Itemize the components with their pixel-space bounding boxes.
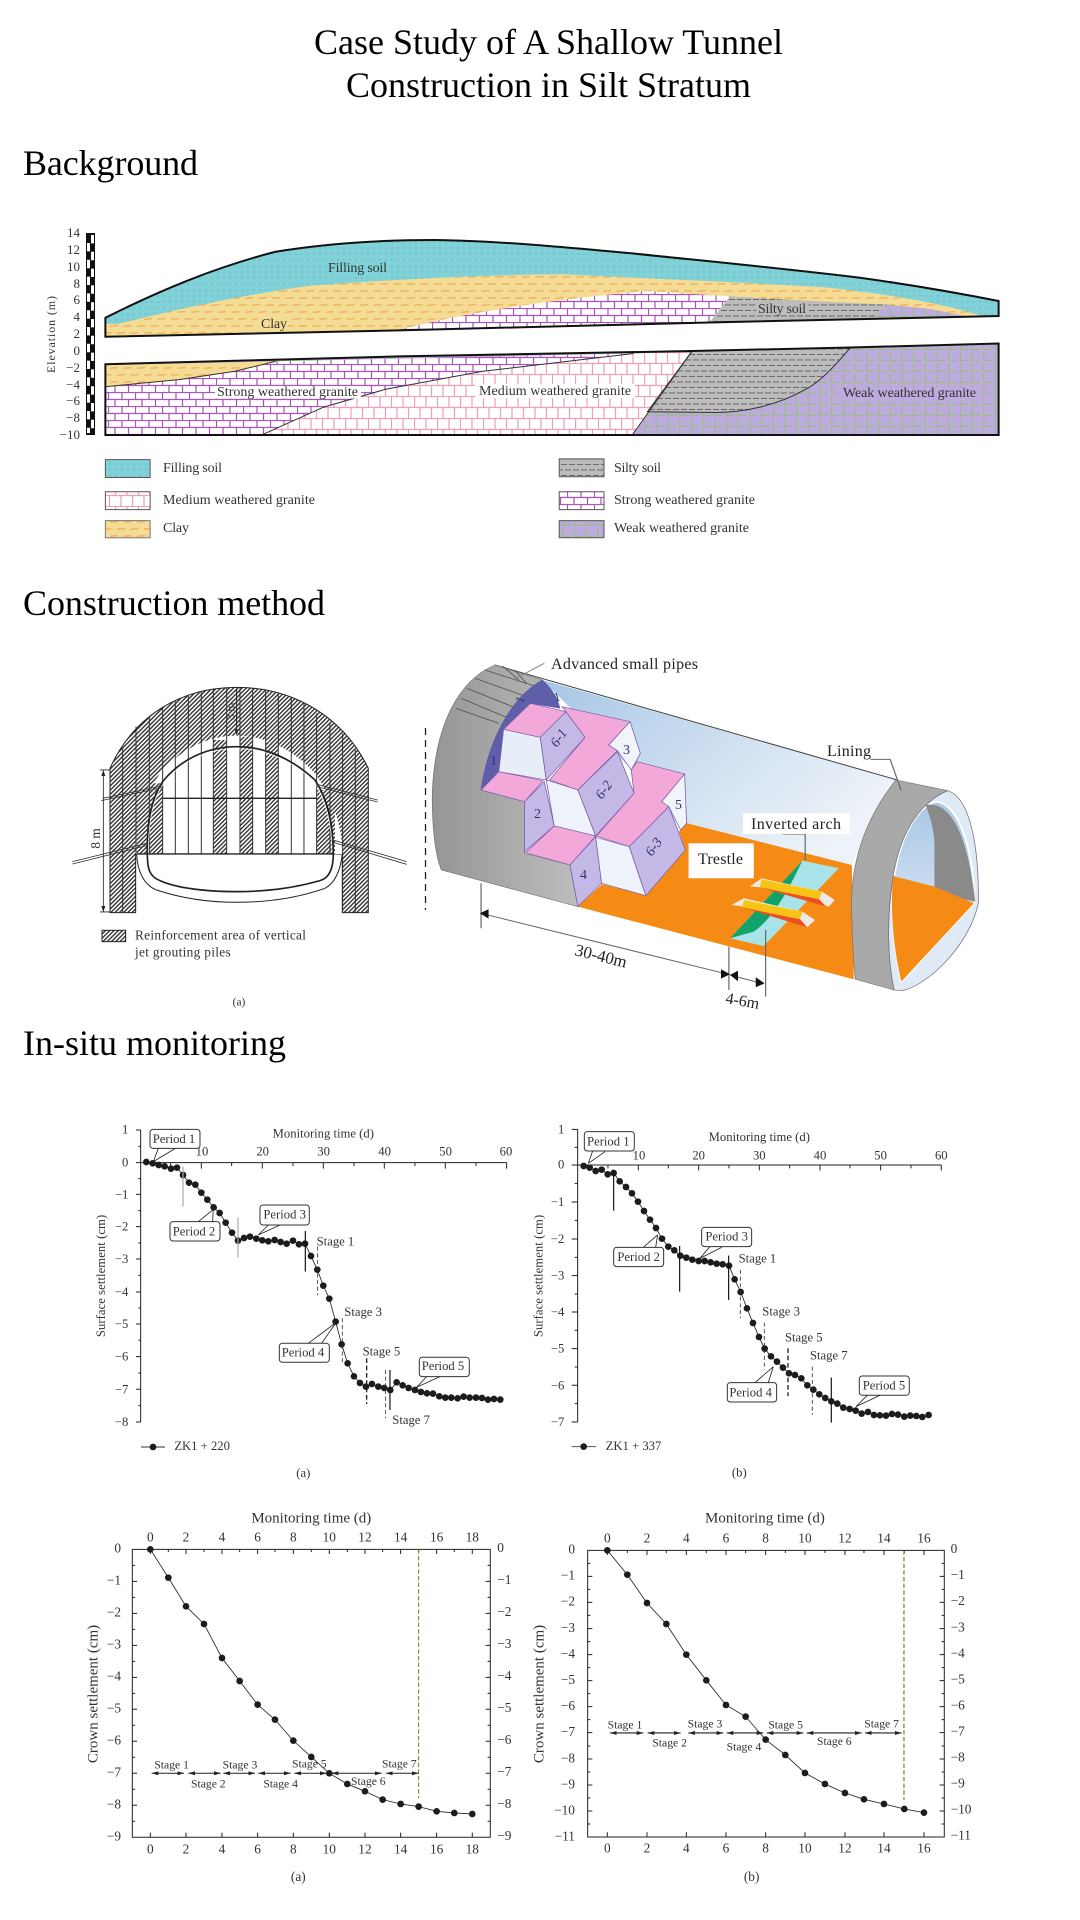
elevation axis labels: −2: [66, 360, 80, 375]
tunnel labels: Advanced small pipes: [551, 656, 698, 673]
x labels: [196, 1144, 512, 1158]
y labels: −1: [115, 1187, 128, 1201]
top x labels: 2: [644, 1531, 650, 1546]
step numbers: 1: [552, 689, 562, 705]
diagram: tunnel cross-section with grouting piles: [72, 687, 407, 1008]
title: Construction in Silt Stratum: [346, 65, 751, 105]
heading: Background: Background: [23, 143, 198, 183]
step numbers: 1: [490, 754, 497, 769]
period callouts: [150, 1129, 469, 1387]
axes: [136, 1130, 507, 1422]
top x labels: [147, 1530, 479, 1545]
legend: reinforcement area: jet grouting piles: [134, 945, 231, 960]
left y labels: −3: [561, 1620, 575, 1635]
y labels: 0: [558, 1157, 564, 1171]
y labels: 1: [558, 1122, 564, 1136]
elevation axis labels: 4: [74, 309, 80, 324]
caption (a): (a): [296, 1466, 310, 1480]
bottom x labels: 8: [290, 1841, 297, 1856]
period callouts: Period 1: [153, 1132, 195, 1146]
tunnel labels: Lining: [827, 743, 871, 760]
tunnel labels: 4-6m: [724, 990, 761, 1013]
tunnel lining: [147, 747, 333, 892]
x labels: 10: [196, 1144, 208, 1158]
bottom x labels: 12: [358, 1841, 372, 1856]
top x labels: 8: [290, 1530, 297, 1545]
x labels: 60: [500, 1144, 512, 1158]
left y labels: 0: [568, 1542, 575, 1557]
stage labels: Stage 5: [785, 1331, 823, 1345]
top x labels: 0: [604, 1531, 611, 1546]
elevation axis labels: 0: [74, 343, 80, 358]
left y labels: −2: [561, 1594, 575, 1609]
top x labels: 8: [762, 1531, 769, 1546]
front lining ring: [851, 780, 978, 991]
elevation axis labels: −4: [66, 377, 80, 392]
axis titles: [85, 1511, 371, 1763]
period callouts: Period 4: [282, 1346, 325, 1360]
stratum labels: Medium weathered granite: [479, 384, 631, 399]
top x labels: 16: [917, 1531, 931, 1546]
bottom x labels: 10: [798, 1841, 812, 1856]
x labels: 30: [317, 1144, 330, 1158]
right y labels: 0: [497, 1540, 504, 1555]
right y labels: −4: [951, 1645, 965, 1660]
left y labels: −2: [107, 1605, 121, 1620]
y labels: −3: [115, 1252, 128, 1266]
left y labels: −7: [561, 1724, 575, 1739]
frame and ticks: [132, 1549, 490, 1837]
elevation axis labels: −6: [66, 393, 80, 408]
y labels: −2: [115, 1220, 128, 1234]
phase and stage markers: [614, 1171, 831, 1423]
top x labels: 18: [466, 1530, 479, 1545]
top x labels: 12: [358, 1530, 372, 1545]
axis titles: Monitoring time (d): [273, 1126, 374, 1140]
period callouts: Period 3: [705, 1230, 748, 1244]
axes: [572, 1129, 941, 1422]
top x labels: 4: [219, 1530, 226, 1545]
stage labels: Stage 6: [351, 1775, 386, 1788]
x labels: 10: [633, 1148, 645, 1162]
tunnel interior: [542, 680, 897, 865]
stratum labels: Weak weathered granite: [843, 386, 976, 401]
stage labels: Stage 1: [154, 1758, 189, 1771]
y labels: −7: [551, 1415, 564, 1429]
axis titles: Monitoring time (d): [705, 1511, 825, 1527]
right y labels: −7: [951, 1723, 965, 1738]
top x labels: 10: [323, 1530, 336, 1545]
axis titles: Surface settlement (cm): [531, 1215, 545, 1337]
right y labels: [951, 1541, 972, 1843]
stage labels: Stage 3: [344, 1305, 382, 1319]
stage labels: Stage 1: [739, 1251, 776, 1265]
top x labels: 14: [877, 1531, 891, 1546]
bottom x labels: 14: [877, 1841, 891, 1856]
right y labels: −3: [497, 1636, 512, 1651]
period callouts: Period 3: [263, 1208, 306, 1222]
axis titles: Crown settlement (cm): [85, 1625, 101, 1763]
bottom x labels: 10: [323, 1841, 336, 1856]
right y labels: −1: [951, 1567, 965, 1582]
stage labels: Stage 7: [382, 1758, 417, 1771]
axis titles: Surface settlement (cm): [94, 1215, 108, 1337]
bottom x labels: 18: [466, 1841, 479, 1856]
left y labels: 0: [114, 1541, 121, 1556]
stage labels: Stage 4: [727, 1741, 761, 1754]
right y labels: 0: [951, 1541, 958, 1556]
x labels: 40: [378, 1144, 391, 1158]
stage labels: Stage 6: [817, 1735, 852, 1748]
y labels: −4: [115, 1285, 129, 1299]
end-of-stage dashed line: [902, 1550, 906, 1800]
y labels: −6: [551, 1378, 564, 1392]
top x labels: 6: [254, 1530, 261, 1545]
bottom x labels: [147, 1841, 479, 1856]
stage labels: Stage 3: [688, 1718, 722, 1731]
stage arrows: [152, 1772, 419, 1775]
y labels: −3: [551, 1269, 564, 1283]
left y labels: −8: [561, 1750, 575, 1765]
y labels: −7: [115, 1382, 128, 1396]
bottom x labels: 12: [838, 1841, 852, 1856]
heading: In-situ monitoring: In-situ monitoring: [23, 1023, 286, 1063]
stratum labels: Filling soil: [328, 261, 387, 276]
stage labels: Stage 3: [762, 1305, 800, 1319]
right y labels: −2: [497, 1604, 511, 1619]
elevation axis labels: 10: [67, 259, 80, 274]
bottom x labels: 16: [917, 1841, 931, 1856]
right y labels: −10: [951, 1802, 972, 1817]
legend: Filling soil: [163, 461, 222, 476]
left y labels: −1: [107, 1573, 121, 1588]
period callouts: Period 4: [729, 1385, 773, 1399]
bottom x labels: 2: [644, 1841, 650, 1856]
caption (b): (b): [744, 1869, 759, 1884]
chart: surface settlement ZK1+337: [531, 1122, 948, 1479]
x labels: 20: [256, 1144, 269, 1158]
y labels: −6: [115, 1350, 128, 1364]
elevation axis labels: 12: [67, 242, 80, 257]
legend: [572, 1439, 661, 1453]
stage labels: Stage 5: [363, 1344, 400, 1358]
advanced pipes hatching: [456, 666, 536, 723]
y labels: 0: [122, 1156, 128, 1170]
tunnel labels: Inverted arch: [751, 816, 841, 833]
right y labels: −7: [497, 1764, 512, 1779]
y labels: 1: [122, 1122, 128, 1136]
x labels: 20: [692, 1148, 705, 1162]
stage labels: Stage 1: [608, 1718, 642, 1731]
right y labels: −2: [951, 1593, 965, 1608]
top x labels: [604, 1531, 931, 1546]
period callouts: Period 5: [863, 1379, 905, 1393]
arch step 1: [481, 680, 560, 790]
period callouts: Period 5: [422, 1359, 464, 1373]
x labels: 50: [874, 1148, 887, 1162]
y labels: −2: [551, 1232, 564, 1246]
hatched reinforcement area: [110, 687, 368, 913]
x labels: 60: [935, 1148, 948, 1162]
excavation steps: [481, 703, 854, 979]
top x labels: 14: [394, 1530, 408, 1545]
left y labels: −6: [107, 1733, 121, 1748]
x labels: 30: [753, 1148, 766, 1162]
caption (a): (a): [233, 996, 245, 1008]
diagram: tunnel excavation perspective: [432, 656, 978, 1013]
bottom x labels: 8: [762, 1841, 769, 1856]
bottom x labels: 6: [254, 1841, 261, 1856]
stage labels: [154, 1758, 417, 1791]
stage labels: Stage 7: [864, 1717, 899, 1730]
chart: crown settlement (b): [531, 1511, 972, 1884]
stage labels: Stage 7: [810, 1348, 848, 1362]
bottom x labels: 14: [394, 1841, 408, 1856]
stratum labels: Silty soil: [758, 302, 806, 317]
period callouts: Period 1: [587, 1134, 630, 1148]
y labels: [551, 1122, 565, 1429]
anchor pipes: [72, 784, 407, 864]
title: Case Study of A Shallow Tunnel: [314, 22, 783, 62]
axis titles: Crown settlement (cm): [531, 1625, 547, 1763]
elevation axis title: Elevation (m): [44, 296, 58, 373]
bottom x labels: 4: [683, 1841, 690, 1856]
dashed centre line: [424, 728, 426, 910]
elevation axis labels: 8: [74, 276, 80, 291]
legend: Weak weathered granite: [614, 521, 749, 536]
right y labels: −5: [497, 1700, 512, 1715]
elevation scale bar: [86, 233, 95, 435]
right y labels: −6: [497, 1732, 512, 1747]
stratum labels: Clay: [261, 317, 287, 332]
legend: Silty soil: [614, 461, 661, 476]
data series: [607, 1550, 924, 1813]
left y labels: −8: [107, 1797, 121, 1812]
right y labels: −4: [497, 1668, 512, 1683]
dimension lines: [481, 883, 766, 997]
right y labels: −8: [951, 1750, 965, 1765]
legend: reinforcement area: [102, 927, 306, 960]
bottom x labels: 0: [147, 1841, 154, 1856]
frame and ticks: [588, 1550, 944, 1837]
period callouts: Period 2: [173, 1224, 215, 1238]
stage labels: [317, 1235, 430, 1427]
step numbers: 5: [675, 798, 682, 813]
stage labels: Stage 1: [317, 1235, 354, 1249]
stage labels: Stage 7: [392, 1413, 430, 1427]
left y labels: −11: [555, 1828, 575, 1843]
bottom x labels: 4: [219, 1841, 226, 1856]
top x labels: 16: [430, 1530, 444, 1545]
caption (a): (a): [291, 1869, 306, 1884]
y labels: [115, 1122, 129, 1429]
bottom x labels: 2: [183, 1841, 189, 1856]
left y labels: −9: [107, 1829, 121, 1844]
stage labels: Stage 2: [652, 1737, 687, 1750]
top x labels: 10: [798, 1531, 812, 1546]
label boxes: [689, 813, 850, 878]
trestle and inverted arch: [730, 861, 839, 946]
x labels: 40: [814, 1148, 826, 1162]
left y labels: −1: [561, 1568, 575, 1583]
x labels: [633, 1148, 948, 1162]
right y labels: −3: [951, 1619, 965, 1634]
step numbers: 4: [580, 868, 587, 883]
left y labels: −3: [107, 1637, 121, 1652]
step numbers: 6-1: [548, 726, 571, 750]
legend: [105, 459, 755, 538]
tunnel labels: [551, 656, 871, 1013]
elevation axis labels: −10: [60, 427, 80, 442]
step numbers: 6-3: [643, 835, 666, 859]
bottom x labels: 16: [430, 1841, 444, 1856]
stratum labels: Strong weathered granite: [217, 385, 358, 400]
left y labels: −5: [107, 1701, 121, 1716]
data series: [150, 1549, 472, 1814]
elevation axis labels: 2: [74, 326, 80, 341]
right y labels: −11: [951, 1828, 971, 1843]
panel: geological profile: [44, 225, 999, 538]
stage labels: Stage 2: [191, 1778, 226, 1791]
tunnel labels: Trestle: [698, 851, 743, 868]
axis titles: Monitoring time (d): [709, 1130, 810, 1144]
right y labels: −5: [951, 1671, 965, 1686]
chart: surface settlement ZK1+220: [94, 1122, 512, 1480]
top x labels: 0: [147, 1530, 154, 1545]
legend: ZK1 + 337: [606, 1439, 661, 1453]
axis titles: [94, 1126, 374, 1337]
elevation axis labels: −8: [66, 410, 80, 425]
stage labels: Stage 5: [768, 1718, 803, 1731]
left y labels: [554, 1542, 575, 1843]
dimension: crown thickness: 3 m: [226, 702, 238, 720]
bottom x labels: 0: [604, 1841, 611, 1856]
axis titles: [531, 1511, 825, 1763]
stage labels: Stage 4: [263, 1778, 298, 1791]
elevation axis labels: [60, 225, 80, 442]
left y labels: −4: [561, 1646, 575, 1661]
period callouts: Period 2: [617, 1250, 660, 1264]
stage labels: [739, 1251, 848, 1362]
right y labels: [497, 1540, 512, 1843]
legend: [141, 1439, 230, 1453]
legend: ZK1 + 220: [174, 1439, 230, 1453]
vertical pile lines: [123, 687, 355, 913]
tunnel labels: 30-40m: [573, 940, 629, 972]
left y labels: −4: [107, 1669, 121, 1684]
right y labels: −9: [951, 1776, 965, 1791]
dimension: 8 m: [88, 770, 110, 912]
legend: Medium weathered granite: [163, 493, 315, 508]
label leaders: [783, 759, 901, 861]
stage labels: Stage 5: [292, 1758, 327, 1771]
phase and stage markers: [183, 1167, 390, 1418]
left y labels: −5: [561, 1672, 575, 1687]
heading: Construction method: Construction method: [23, 583, 325, 623]
period callouts: [584, 1132, 909, 1407]
chart: crown settlement (a): [85, 1511, 512, 1884]
end-of-stage dashed line: [417, 1549, 420, 1798]
caption (b): (b): [732, 1465, 747, 1479]
step numbers: 3: [623, 743, 630, 758]
left tunnel shell: [432, 665, 578, 907]
elevation axis labels: 6: [74, 292, 80, 307]
legend: Clay: [163, 521, 189, 536]
y labels: −1: [551, 1195, 564, 1209]
dimension: crown thickness: [226, 688, 239, 735]
stratum labels: [217, 261, 976, 401]
y labels: −5: [115, 1317, 128, 1331]
legend: Strong weathered granite: [614, 493, 755, 508]
y labels: −8: [115, 1415, 128, 1429]
top x labels: 12: [838, 1531, 852, 1546]
elevation axis labels: 14: [67, 225, 80, 240]
legend: reinforcement area: Reinforcement area of vertical: [135, 927, 306, 942]
axis titles: Monitoring time (d): [251, 1511, 371, 1527]
x labels: 50: [439, 1144, 452, 1158]
right y labels: −1: [497, 1572, 511, 1587]
y labels: −5: [551, 1342, 564, 1356]
top x labels: 4: [683, 1531, 690, 1546]
stage arrows: [610, 1731, 902, 1735]
step numbers: 6-2: [593, 778, 616, 802]
bottom x labels: [604, 1841, 931, 1856]
axis titles: [531, 1130, 810, 1337]
y labels: −4: [551, 1305, 565, 1319]
dimension: 8 m: 8 m: [88, 828, 103, 849]
title: [314, 22, 783, 105]
top x labels: 2: [183, 1530, 189, 1545]
left y labels: [107, 1541, 121, 1844]
left y labels: −10: [554, 1802, 575, 1817]
step numbers: [490, 689, 682, 883]
bottom x labels: 6: [723, 1841, 730, 1856]
data series: [584, 1166, 929, 1417]
left y labels: −7: [107, 1765, 121, 1780]
strata cross-section: [105, 240, 999, 435]
right y labels: −8: [497, 1796, 512, 1811]
stage labels: [608, 1717, 899, 1754]
left y labels: −6: [561, 1698, 575, 1713]
step numbers: 2: [534, 807, 541, 822]
right y labels: −9: [497, 1828, 512, 1843]
left y labels: −9: [561, 1776, 575, 1791]
stage labels: Stage 3: [223, 1758, 257, 1771]
step numbers: 1: [512, 694, 528, 705]
right y labels: −6: [951, 1697, 965, 1712]
data series: [146, 1162, 500, 1400]
top x labels: 6: [723, 1531, 730, 1546]
